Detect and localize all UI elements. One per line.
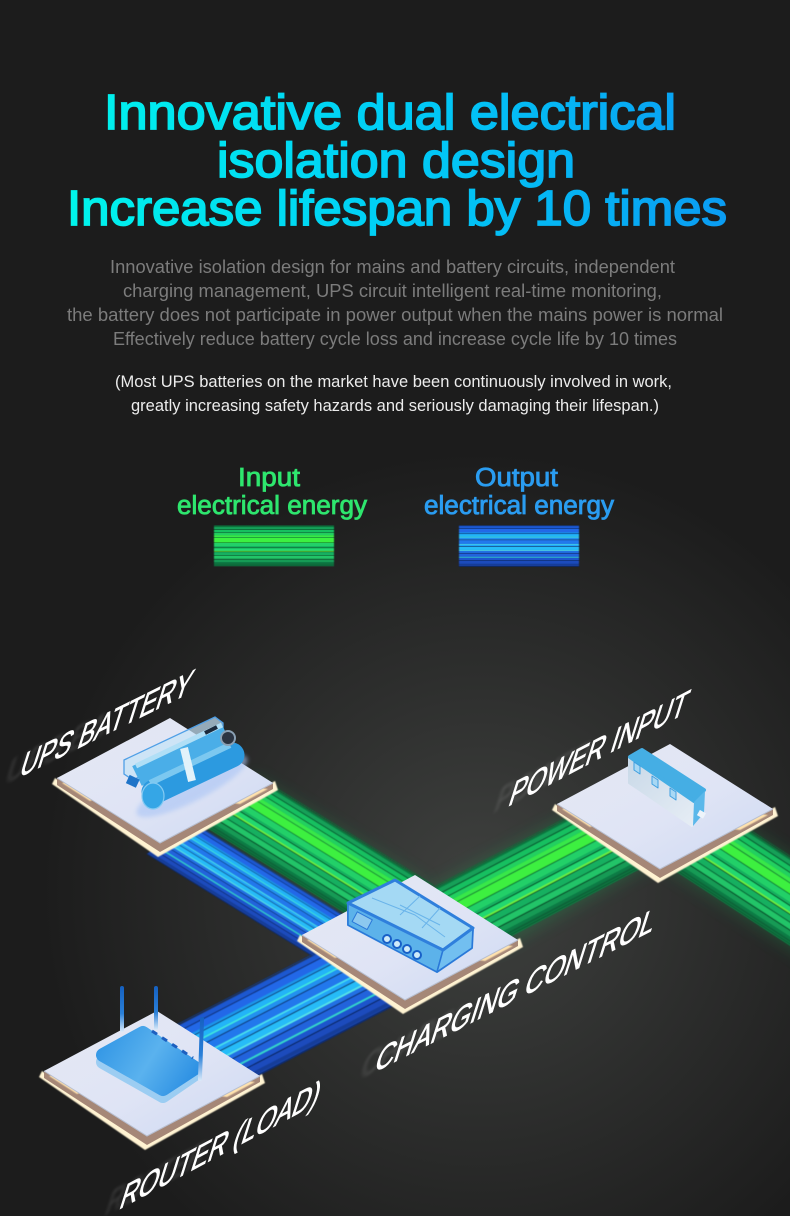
icon: charging control box [348, 880, 473, 972]
icon: power module [629, 750, 706, 826]
platform: charging control [297, 875, 523, 1014]
platform: power input [552, 744, 778, 883]
note text [115, 373, 672, 415]
label: power input: POWER [490, 733, 596, 822]
label: charging control: CHARGING CONTROL [370, 899, 661, 1082]
label: ups battery: UPS BA [1, 704, 113, 793]
label: power input [490, 683, 694, 822]
icon: router [103, 986, 204, 1096]
label: power input: POWER INPUT [504, 683, 694, 816]
legend: output electrical energy: electrical energy [424, 492, 614, 520]
label: ups battery: UPS BATTERY [15, 662, 198, 787]
title: Innovative dual electrical [104, 86, 676, 140]
beam: charging control to router [150, 945, 414, 1088]
platform: ups battery [52, 717, 278, 857]
label: charging control [356, 899, 661, 1088]
description text: Innovative isolation design for mains and battery circuits, independent [110, 257, 675, 277]
legend: input electrical energy [177, 464, 367, 566]
label: charging control: CHARGI [356, 998, 467, 1088]
description text: the battery does not participate in power output when the mains power is normal [67, 305, 723, 325]
beam: battery to charging control, blue [146, 823, 370, 962]
beam: power input to charging control [410, 805, 671, 947]
description text: Effectively reduce battery cycle loss and increase cycle life by 10 times [113, 329, 677, 349]
label: router (load): ROUTER (LOAD) [115, 1072, 326, 1216]
icon: battery pack [124, 717, 254, 828]
note text: greatly increasing safety hazards and seriously damaging their lifespan.) [131, 397, 659, 415]
diagram beams [146, 776, 790, 1088]
title: Increase lifespan by 10 times [67, 182, 727, 236]
label: router (load) [101, 1072, 326, 1216]
description text: charging management, UPS circuit intelligent real-time monitoring, [123, 281, 662, 301]
legend: output electrical energy: Output [475, 464, 558, 492]
legend: output electrical energy [424, 464, 614, 567]
label: ups battery [1, 662, 198, 793]
description text [67, 257, 723, 349]
note text: (Most UPS batteries on the market have been continuously involved in work, [115, 373, 672, 391]
legend: input electrical energy: electrical energy [177, 492, 367, 520]
legend: input electrical energy: Input [238, 464, 300, 492]
title: isolation design [217, 134, 575, 188]
beam: battery to charging control, green [198, 777, 434, 930]
platform: router [39, 986, 265, 1150]
title [67, 86, 727, 236]
beam: power input to right edge [662, 810, 790, 993]
